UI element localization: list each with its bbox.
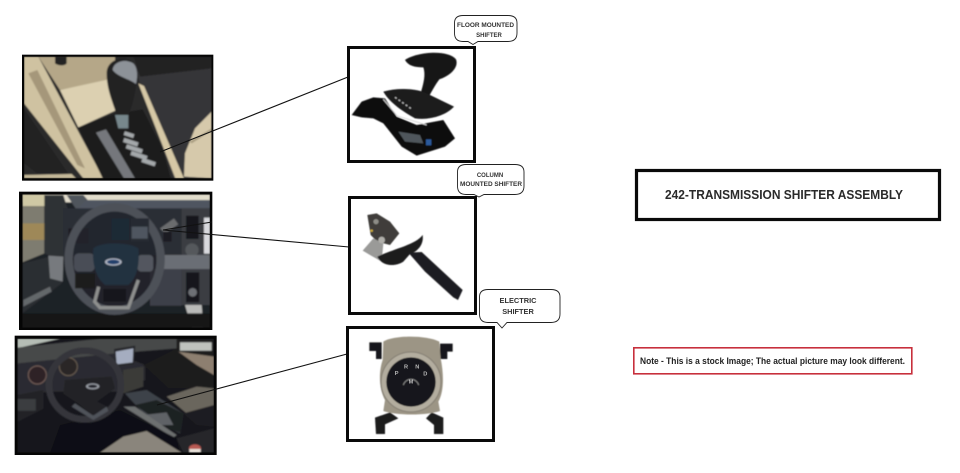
icon: electric rotary shifter part [369, 337, 453, 434]
callout: column mounted shifter: MOUNTED SHIFTER [460, 182, 523, 188]
note box [634, 348, 912, 374]
gear label N: N [415, 364, 419, 370]
icon: column shifter part [363, 213, 463, 300]
panel: column mounted shifter part [350, 198, 476, 314]
note box: Note - This is a stock Image; The actual picture may look different. [640, 356, 905, 366]
callout: electric shifter: SHIFTER [502, 307, 534, 316]
photo: steering wheel with column shifter [19, 192, 212, 330]
connector line: column shifter [163, 222, 349, 247]
panel: electric shifter part [348, 328, 494, 440]
callout: electric shifter [480, 290, 560, 328]
photo: cabin with electric shifter [15, 336, 217, 455]
callout: electric shifter: ELECTRIC [500, 296, 537, 305]
panel: floor mounted shifter part [348, 48, 474, 162]
connector line: floor shifter [160, 77, 348, 152]
callout: column mounted shifter [458, 164, 524, 197]
gear label M: M [409, 380, 414, 386]
title box: 242-TRANSMISSION SHIFTER ASSEMBLY [665, 188, 904, 202]
connector line: electric shifter [157, 354, 347, 405]
callout: column mounted shifter: COLUMN [477, 173, 503, 179]
callout: floor mounted shifter [454, 16, 517, 44]
gear label P: P [395, 371, 399, 377]
gear label R: R [404, 364, 408, 370]
icon: floor shifter part [352, 53, 457, 156]
photo: floor mounted shifter in console [22, 55, 213, 181]
gear label D: D [423, 372, 427, 378]
callout: floor mounted shifter: FLOOR MOUNTED [457, 23, 515, 29]
title box [636, 170, 940, 220]
callout: floor mounted shifter: SHIFTER [476, 33, 502, 39]
